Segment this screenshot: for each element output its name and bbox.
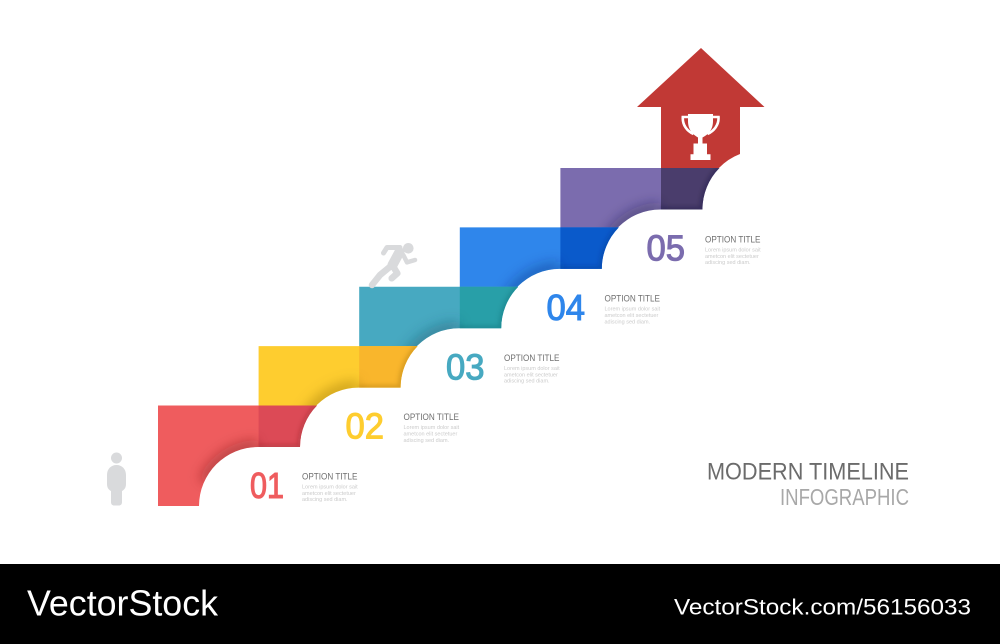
icon: standing person — [107, 452, 126, 506]
step 3 band — [359, 286, 518, 346]
heading — [707, 458, 909, 510]
option 03 — [446, 346, 560, 387]
description 04: ametcon elit sectetuer — [604, 313, 658, 319]
description 01: Lorem ipsum dolor sait — [302, 484, 358, 490]
description 05: Lorem ipsum dolor sait — [705, 248, 761, 254]
footer logo: VectorStock — [27, 582, 219, 624]
option title 01: OPTION TITLE — [302, 471, 358, 481]
footer band — [0, 564, 1000, 644]
option 05 — [646, 228, 761, 268]
description 05: adiscing sed diam. — [705, 260, 751, 266]
description 03: ametcon elit sectetuer — [504, 372, 558, 378]
description 02: Lorem ipsum dolor sait — [404, 425, 460, 431]
icon: running person — [372, 243, 415, 285]
arrow — [637, 48, 764, 168]
number 01: 01 — [250, 465, 284, 506]
option 02 — [346, 406, 460, 447]
option 04 — [546, 287, 661, 328]
description 02: adiscing sed diam. — [404, 438, 450, 444]
description 01: adiscing sed diam. — [302, 497, 348, 503]
description 03: Lorem ipsum dolor sait — [504, 366, 560, 372]
description 04: adiscing sed diam. — [604, 319, 651, 325]
icon: trophy — [683, 114, 719, 160]
option title 03: OPTION TITLE — [504, 353, 560, 363]
option title 04: OPTION TITLE — [604, 294, 660, 304]
description 03: adiscing sed diam. — [504, 379, 550, 385]
description 01: ametcon elit sectetuer — [302, 491, 356, 497]
description 05: ametcon elit sectetuer — [705, 254, 759, 260]
number 03: 03 — [446, 346, 484, 387]
number 04: 04 — [546, 287, 585, 328]
description 04: Lorem ipsum dolor sait — [604, 307, 661, 313]
number 02: 02 — [346, 406, 384, 447]
heading line 2: INFOGRAPHIC — [780, 484, 909, 510]
step 5 band — [560, 168, 720, 228]
step 4 band — [460, 227, 619, 287]
number 05: 05 — [646, 228, 685, 268]
description 02: ametcon elit sectetuer — [404, 432, 457, 438]
step 1 band — [158, 406, 317, 506]
footer image id: VectorStock.com/56156033 — [674, 594, 971, 619]
option title 02: OPTION TITLE — [404, 412, 459, 422]
option title 05: OPTION TITLE — [705, 234, 761, 244]
arrow head with trophy — [637, 48, 764, 168]
option 01 — [250, 465, 358, 506]
heading line 1: MODERN TIMELINE — [707, 458, 909, 485]
step 2 band — [258, 346, 418, 406]
